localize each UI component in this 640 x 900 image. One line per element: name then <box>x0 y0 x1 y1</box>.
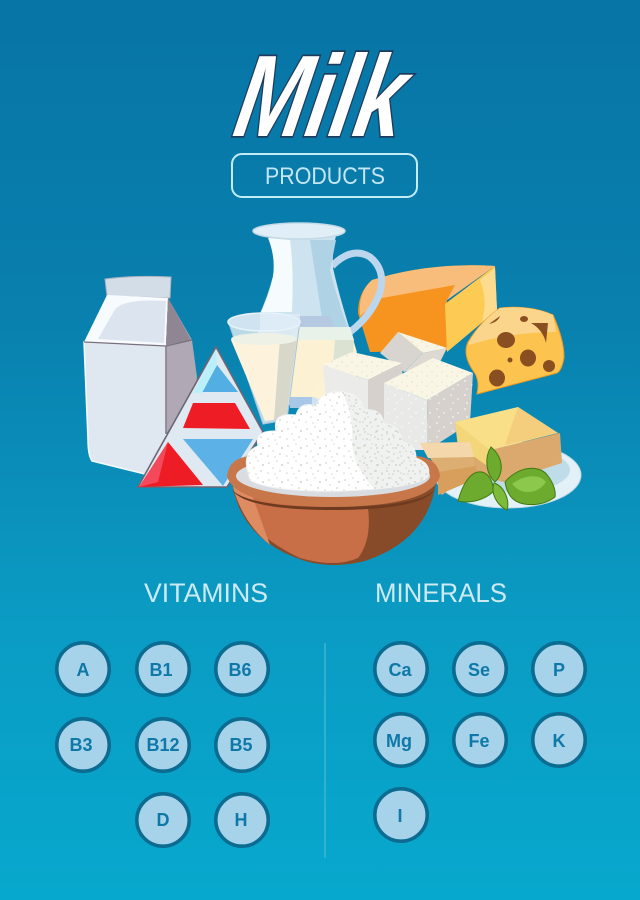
badge: I <box>375 789 427 841</box>
badge: B1: B1 <box>149 660 173 680</box>
badge: B1 <box>137 643 189 695</box>
badge: K: K <box>552 731 566 751</box>
badge: Se <box>454 643 506 695</box>
badge: Mg: Mg <box>386 731 412 751</box>
badge: B3: B3 <box>69 735 93 755</box>
icon: basil leaves <box>458 447 555 510</box>
badge: H: H <box>234 810 248 830</box>
icon: carton pyramid <box>138 347 263 487</box>
badge: Ca: Ca <box>388 660 412 680</box>
icon: butter on plate <box>420 407 581 508</box>
icon: glass of milk <box>228 313 300 424</box>
badge: B12: B12 <box>146 735 180 755</box>
badge: P <box>533 643 585 695</box>
badge: Se: Se <box>468 660 490 680</box>
badge: A: A <box>76 660 90 680</box>
badge: D: D <box>156 810 170 830</box>
panel: vitamins badges <box>57 643 268 846</box>
badge: H <box>216 794 268 846</box>
badge: B5 <box>216 719 268 771</box>
icon: glass jug with milk <box>253 223 382 408</box>
badge: D <box>137 794 189 846</box>
icon: swiss cheese <box>466 307 564 394</box>
badge: B6 <box>216 643 268 695</box>
badge: B3 <box>57 719 109 771</box>
badge: B5: B5 <box>229 735 253 755</box>
icon: tofu cubes <box>323 332 473 450</box>
badge: K <box>533 714 585 766</box>
badge: Fe <box>454 714 506 766</box>
title: Milk <box>226 32 422 161</box>
badge: I: I <box>397 806 403 826</box>
badge: Ca <box>375 643 427 695</box>
badge: A <box>57 643 109 695</box>
subtitle box: products <box>232 154 417 197</box>
illustration: dairy products <box>84 223 581 565</box>
heading: vitamins: VITAMINS <box>144 578 268 608</box>
badge: B12 <box>137 719 189 771</box>
heading: minerals: MINERALS <box>375 578 507 608</box>
subtitle box: products: PRODUCTS <box>265 163 385 190</box>
badge: Mg <box>375 714 427 766</box>
icon: milk carton <box>84 276 197 474</box>
divider <box>324 643 326 858</box>
badge: B6: B6 <box>228 660 252 680</box>
badge: P: P <box>553 660 565 680</box>
icon: bowl of cottage cheese <box>227 392 440 565</box>
badge: Fe: Fe <box>468 731 490 751</box>
panel: minerals badges <box>375 643 585 841</box>
icon: orange cheese wedge <box>358 265 497 352</box>
